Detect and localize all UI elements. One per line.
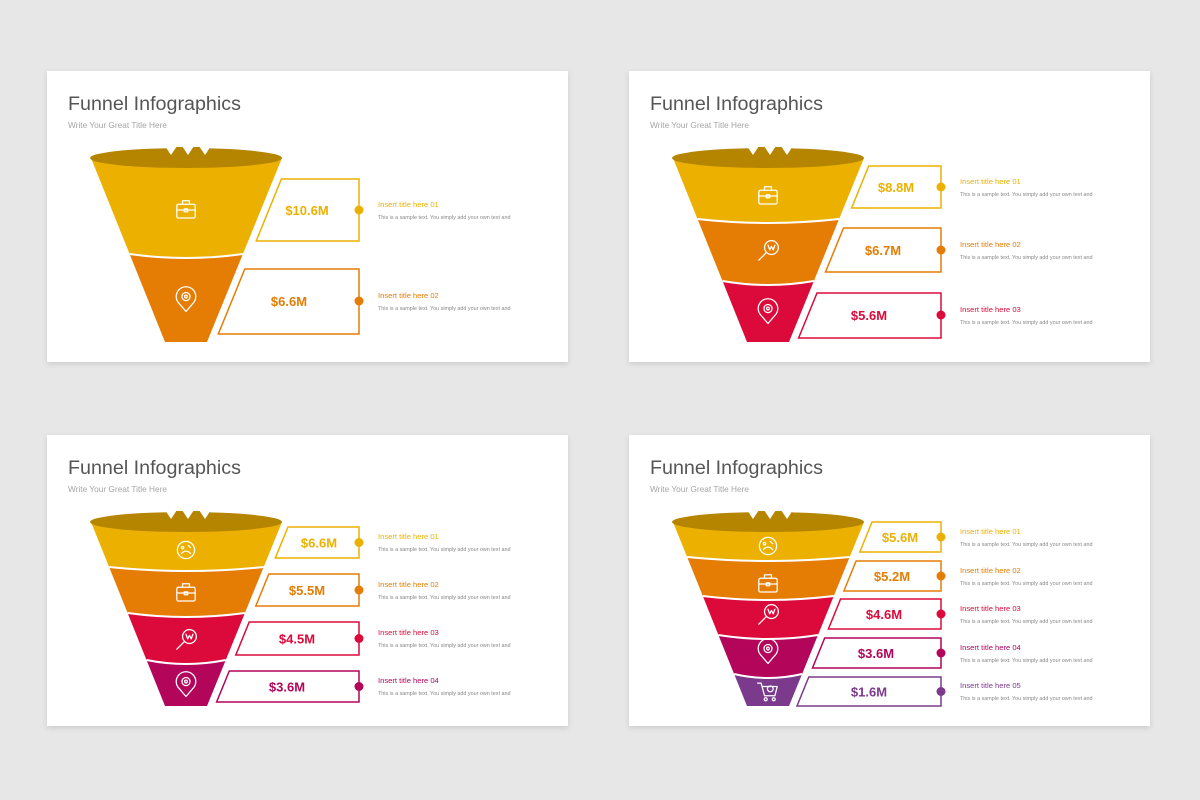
item 5: Insert title here 05 — [960, 681, 1021, 690]
item 3: Insert title here 03 — [378, 628, 439, 637]
item 4: This is a sample text. You simply add your own text and — [960, 658, 1092, 664]
item 4: $3.6M — [269, 680, 305, 694]
title: Funnel Infographics — [68, 93, 241, 115]
funnel — [90, 146, 282, 342]
subtitle: Write Your Great Title Here — [68, 484, 167, 494]
item 3: Insert title here 03 — [960, 604, 1021, 613]
item 4: Insert title here 04 — [960, 643, 1021, 652]
title: Funnel Infographics — [68, 457, 241, 479]
item 3: This is a sample text. You simply add your own text and — [960, 320, 1092, 326]
panel: two-stage funnel — [47, 71, 568, 362]
panel: four-stage funnel — [47, 435, 568, 726]
item 2 — [826, 228, 1092, 272]
item 3: $4.6M — [866, 607, 902, 622]
item 1: This is a sample text. You simply add your own text and — [960, 192, 1092, 198]
item 2: $5.2M — [874, 569, 910, 584]
item 5 — [797, 677, 1092, 706]
funnel — [672, 146, 864, 342]
funnel — [672, 510, 864, 706]
item 2: Insert title here 02 — [960, 566, 1021, 575]
item 4 — [812, 638, 1092, 668]
item 1 — [860, 522, 1092, 552]
item 4: $3.6M — [858, 646, 894, 661]
item 1: $5.6M — [882, 530, 918, 545]
item 2: This is a sample text. You simply add your own text and — [960, 581, 1092, 587]
item 1: Insert title here 01 — [960, 177, 1021, 186]
item 1: $8.8M — [878, 180, 914, 195]
item 2: $6.6M — [271, 294, 307, 309]
item 3: Insert title here 03 — [960, 305, 1021, 314]
subtitle: Write Your Great Title Here — [650, 484, 749, 494]
item 3: $5.6M — [851, 308, 887, 323]
item 1 — [852, 166, 1092, 208]
item 2: Insert title here 02 — [378, 580, 439, 589]
item 4: Insert title here 04 — [378, 676, 439, 685]
item 3 — [799, 293, 1092, 338]
item 2 — [844, 561, 1092, 591]
panel: three-stage funnel — [629, 71, 1150, 362]
subtitle: Write Your Great Title Here — [650, 120, 749, 130]
panel: five-stage funnel — [629, 435, 1150, 726]
item 1: This is a sample text. You simply add your own text and — [378, 547, 510, 553]
item 5: This is a sample text. You simply add your own text and — [960, 696, 1092, 702]
item 2 — [256, 574, 510, 606]
item 1: $6.6M — [301, 536, 337, 550]
item 2: $5.5M — [289, 583, 325, 598]
item 1: $10.6M — [285, 203, 329, 218]
item 1: This is a sample text. You simply add your own text and — [378, 215, 510, 221]
item 2: This is a sample text. You simply add your own text and — [960, 255, 1092, 261]
item 2: This is a sample text. You simply add your own text and — [378, 306, 510, 312]
item 3: This is a sample text. You simply add your own text and — [378, 643, 510, 649]
item 3 — [828, 599, 1092, 629]
item 4: This is a sample text. You simply add your own text and — [378, 691, 510, 697]
item 3: $4.5M — [279, 632, 315, 646]
item 1: Insert title here 01 — [960, 527, 1021, 536]
item 3: This is a sample text. You simply add your own text and — [960, 619, 1092, 625]
funnel — [90, 510, 282, 706]
item 3 — [236, 622, 510, 655]
item 1: Insert title here 01 — [378, 200, 439, 209]
item 4 — [217, 671, 510, 702]
item 1: This is a sample text. You simply add your own text and — [960, 542, 1092, 548]
item 1 — [275, 527, 510, 558]
title: Funnel Infographics — [650, 93, 823, 115]
item 2 — [218, 269, 510, 334]
item 5: $1.6M — [851, 684, 887, 700]
item 1: Insert title here 01 — [378, 532, 439, 541]
item 2: Insert title here 02 — [960, 240, 1021, 249]
title: Funnel Infographics — [650, 457, 823, 479]
item 1 — [256, 179, 510, 241]
subtitle: Write Your Great Title Here — [68, 120, 167, 130]
item 2: $6.7M — [865, 243, 901, 258]
item 2: Insert title here 02 — [378, 291, 439, 300]
item 2: This is a sample text. You simply add your own text and — [378, 595, 510, 601]
